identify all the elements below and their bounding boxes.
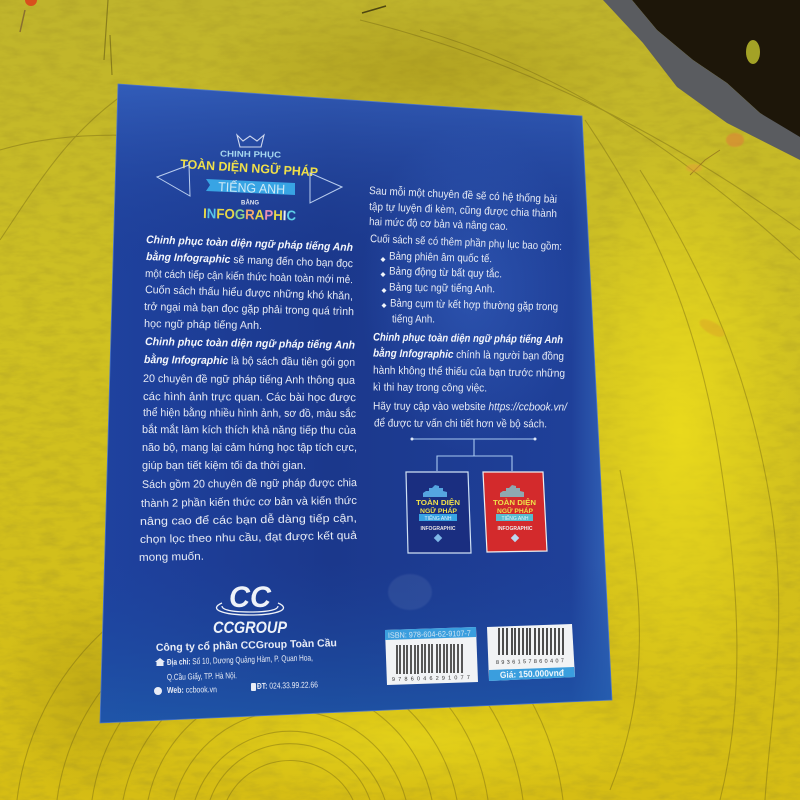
left column text	[139, 234, 358, 564]
price barcode label	[487, 624, 575, 681]
book thumbnail: red: NGỮ PHÁP	[497, 506, 534, 515]
connector lines	[410, 438, 536, 471]
left column text: học ngữ pháp tiếng Anh.	[144, 318, 262, 332]
right column text: hành không thể thiếu của bạn trước những	[373, 365, 565, 380]
bark edge of the log	[603, 0, 800, 160]
left column text: bằng Infographic là bộ sách đầu tiên gói gọn	[144, 353, 355, 369]
heading: bang: BẰNG	[241, 198, 259, 206]
title logo	[157, 135, 342, 223]
book thumbnail: red	[483, 472, 547, 552]
right column text: Sau mỗi một chuyên đề sẽ có hệ thống bài	[369, 184, 557, 206]
left column text: 20 chuyên đề ngữ pháp tiếng Anh thông qua	[143, 373, 356, 387]
bulleted appendix list: Bảng động từ bất quy tắc.	[389, 265, 502, 280]
bulleted appendix list: Bảng cụm từ kết hợp thường gặp trong	[390, 298, 558, 313]
left column text: não bộ, mang lại cảm hứng học tập tích cực,	[142, 442, 357, 454]
price barcode label: 8936157860407	[496, 658, 564, 666]
left column text: mong muốn.	[139, 551, 204, 564]
left column text: giúp bạn tiết kiệm tối đa thời gian.	[142, 460, 306, 472]
left column text: thành 2 phần kiến thức cơ bản và kiến thức	[141, 495, 358, 510]
fruit on ground	[746, 40, 760, 64]
left column text: chọn lọc theo nhu cầu, đạt được kết quả	[140, 530, 358, 546]
icon: crown	[237, 135, 264, 147]
book thumbnail: red: TOÀN DIỆN	[493, 498, 536, 507]
icon: web	[154, 687, 162, 695]
logo: CC Group: CCGROUP	[213, 618, 288, 637]
company details: Q.Cầu Giấy, TP. Hà Nội.	[167, 670, 237, 682]
book thumbnail: blue: TIẾNG ANH	[425, 515, 452, 522]
right column text: bằng Infographic chính là người bạn đồng	[373, 347, 564, 363]
book thumbnail: blue: INFOGRAPHIC	[420, 526, 456, 532]
icon: home	[155, 658, 165, 666]
icon: phone	[251, 683, 256, 691]
bulleted appendix list: Bảng phiên âm quốc tế.	[389, 251, 492, 265]
left column text: các hình ảnh trực quan. Các bài học được	[143, 391, 357, 404]
heading: chinh phuc: CHINH PHỤC	[220, 149, 281, 160]
company details: ĐT: 024.33.99.22.66	[257, 679, 318, 691]
heading: infographic: INFOGRAPHIC	[203, 205, 296, 223]
right column text: hai mức độ cơ bản và nâng cao.	[369, 216, 508, 233]
left column text: bắt mắt làm kích thích khả năng tiếp thu của	[142, 423, 357, 437]
left column text: Sách gồm 20 chuyên đề ngữ pháp được chia	[142, 477, 358, 491]
company details: Địa chỉ: Số 10, Dương Quảng Hàm, P. Quan Hoa,	[167, 652, 313, 667]
right column text: tập tự luyện đi kèm, cũng được chia thành	[369, 201, 557, 220]
left column text: bằng Infographic sẽ mang đến cho bạn đọc	[146, 250, 354, 270]
ribbon: tieng anh: TIẾNG ANH	[218, 179, 285, 197]
logo: CC Group	[213, 581, 288, 637]
arrows	[157, 165, 342, 203]
book thumbnail: blue: NGỮ PHÁP	[420, 506, 458, 515]
left column text: Cuốn sách thấu hiểu được những khó khăn,	[145, 284, 353, 303]
ISBN barcode label: ISBN: 978-604-62-9107-7	[388, 629, 472, 640]
company details: Web: ccbook.vn	[167, 684, 217, 695]
right column text: Cuối sách sẽ có thêm phần phụ lục bao gồm:	[370, 233, 562, 253]
price barcode label: Giá: 150.000vnđ	[500, 668, 564, 680]
right column text: để được tư vấn chi tiết hơn về bộ sách.	[374, 418, 547, 430]
left column text: Chinh phục toàn diện ngữ pháp tiếng Anh	[146, 234, 353, 254]
bulleted appendix list: tiếng Anh.	[392, 314, 435, 326]
right column text: kì thi hay trong công việc.	[373, 382, 487, 394]
right column text: Chinh phục toàn diện ngữ pháp tiếng Anh	[373, 332, 563, 346]
bulleted appendix list	[380, 251, 558, 326]
left column text: một cách tiếp cận kiến thức hoàn toàn mới mẻ.	[145, 268, 353, 286]
company details	[154, 637, 337, 695]
right column text	[369, 184, 568, 430]
dark background corner	[632, 0, 800, 140]
heading: toan dien ngu phap: TOÀN DIỆN NGỮ PHÁP	[180, 156, 318, 179]
left column text: thể hiện bằng nhiều hình ảnh, sơ đồ, màu sắc	[143, 406, 357, 420]
ISBN barcode label	[385, 627, 478, 685]
book thumbnail: red: TIẾNG ANH	[502, 515, 529, 522]
company details: Công ty cổ phần CCGroup Toàn Cầu	[156, 637, 337, 654]
book thumbnail: blue	[406, 472, 471, 553]
book thumbnail: blue: TOÀN DIỆN	[416, 498, 460, 507]
right column text: Hãy truy cập vào website https://ccbook.vn/	[373, 401, 568, 414]
book back cover	[100, 84, 612, 723]
book thumbnail: red: INFOGRAPHIC	[498, 526, 533, 532]
ISBN barcode label: 9786046291077	[392, 675, 470, 683]
left column text: nâng cao để các bạn dễ dàng tiếp cận,	[140, 512, 357, 528]
logo: CC Group: CC	[229, 581, 272, 614]
left column text: Chinh phục toàn diện ngữ pháp tiếng Anh	[145, 336, 355, 352]
bulleted appendix list: Bảng tục ngữ tiếng Anh.	[389, 282, 495, 295]
left column text: trở ngại mà bạn đọc gặp phải trong quá trình	[144, 301, 354, 318]
